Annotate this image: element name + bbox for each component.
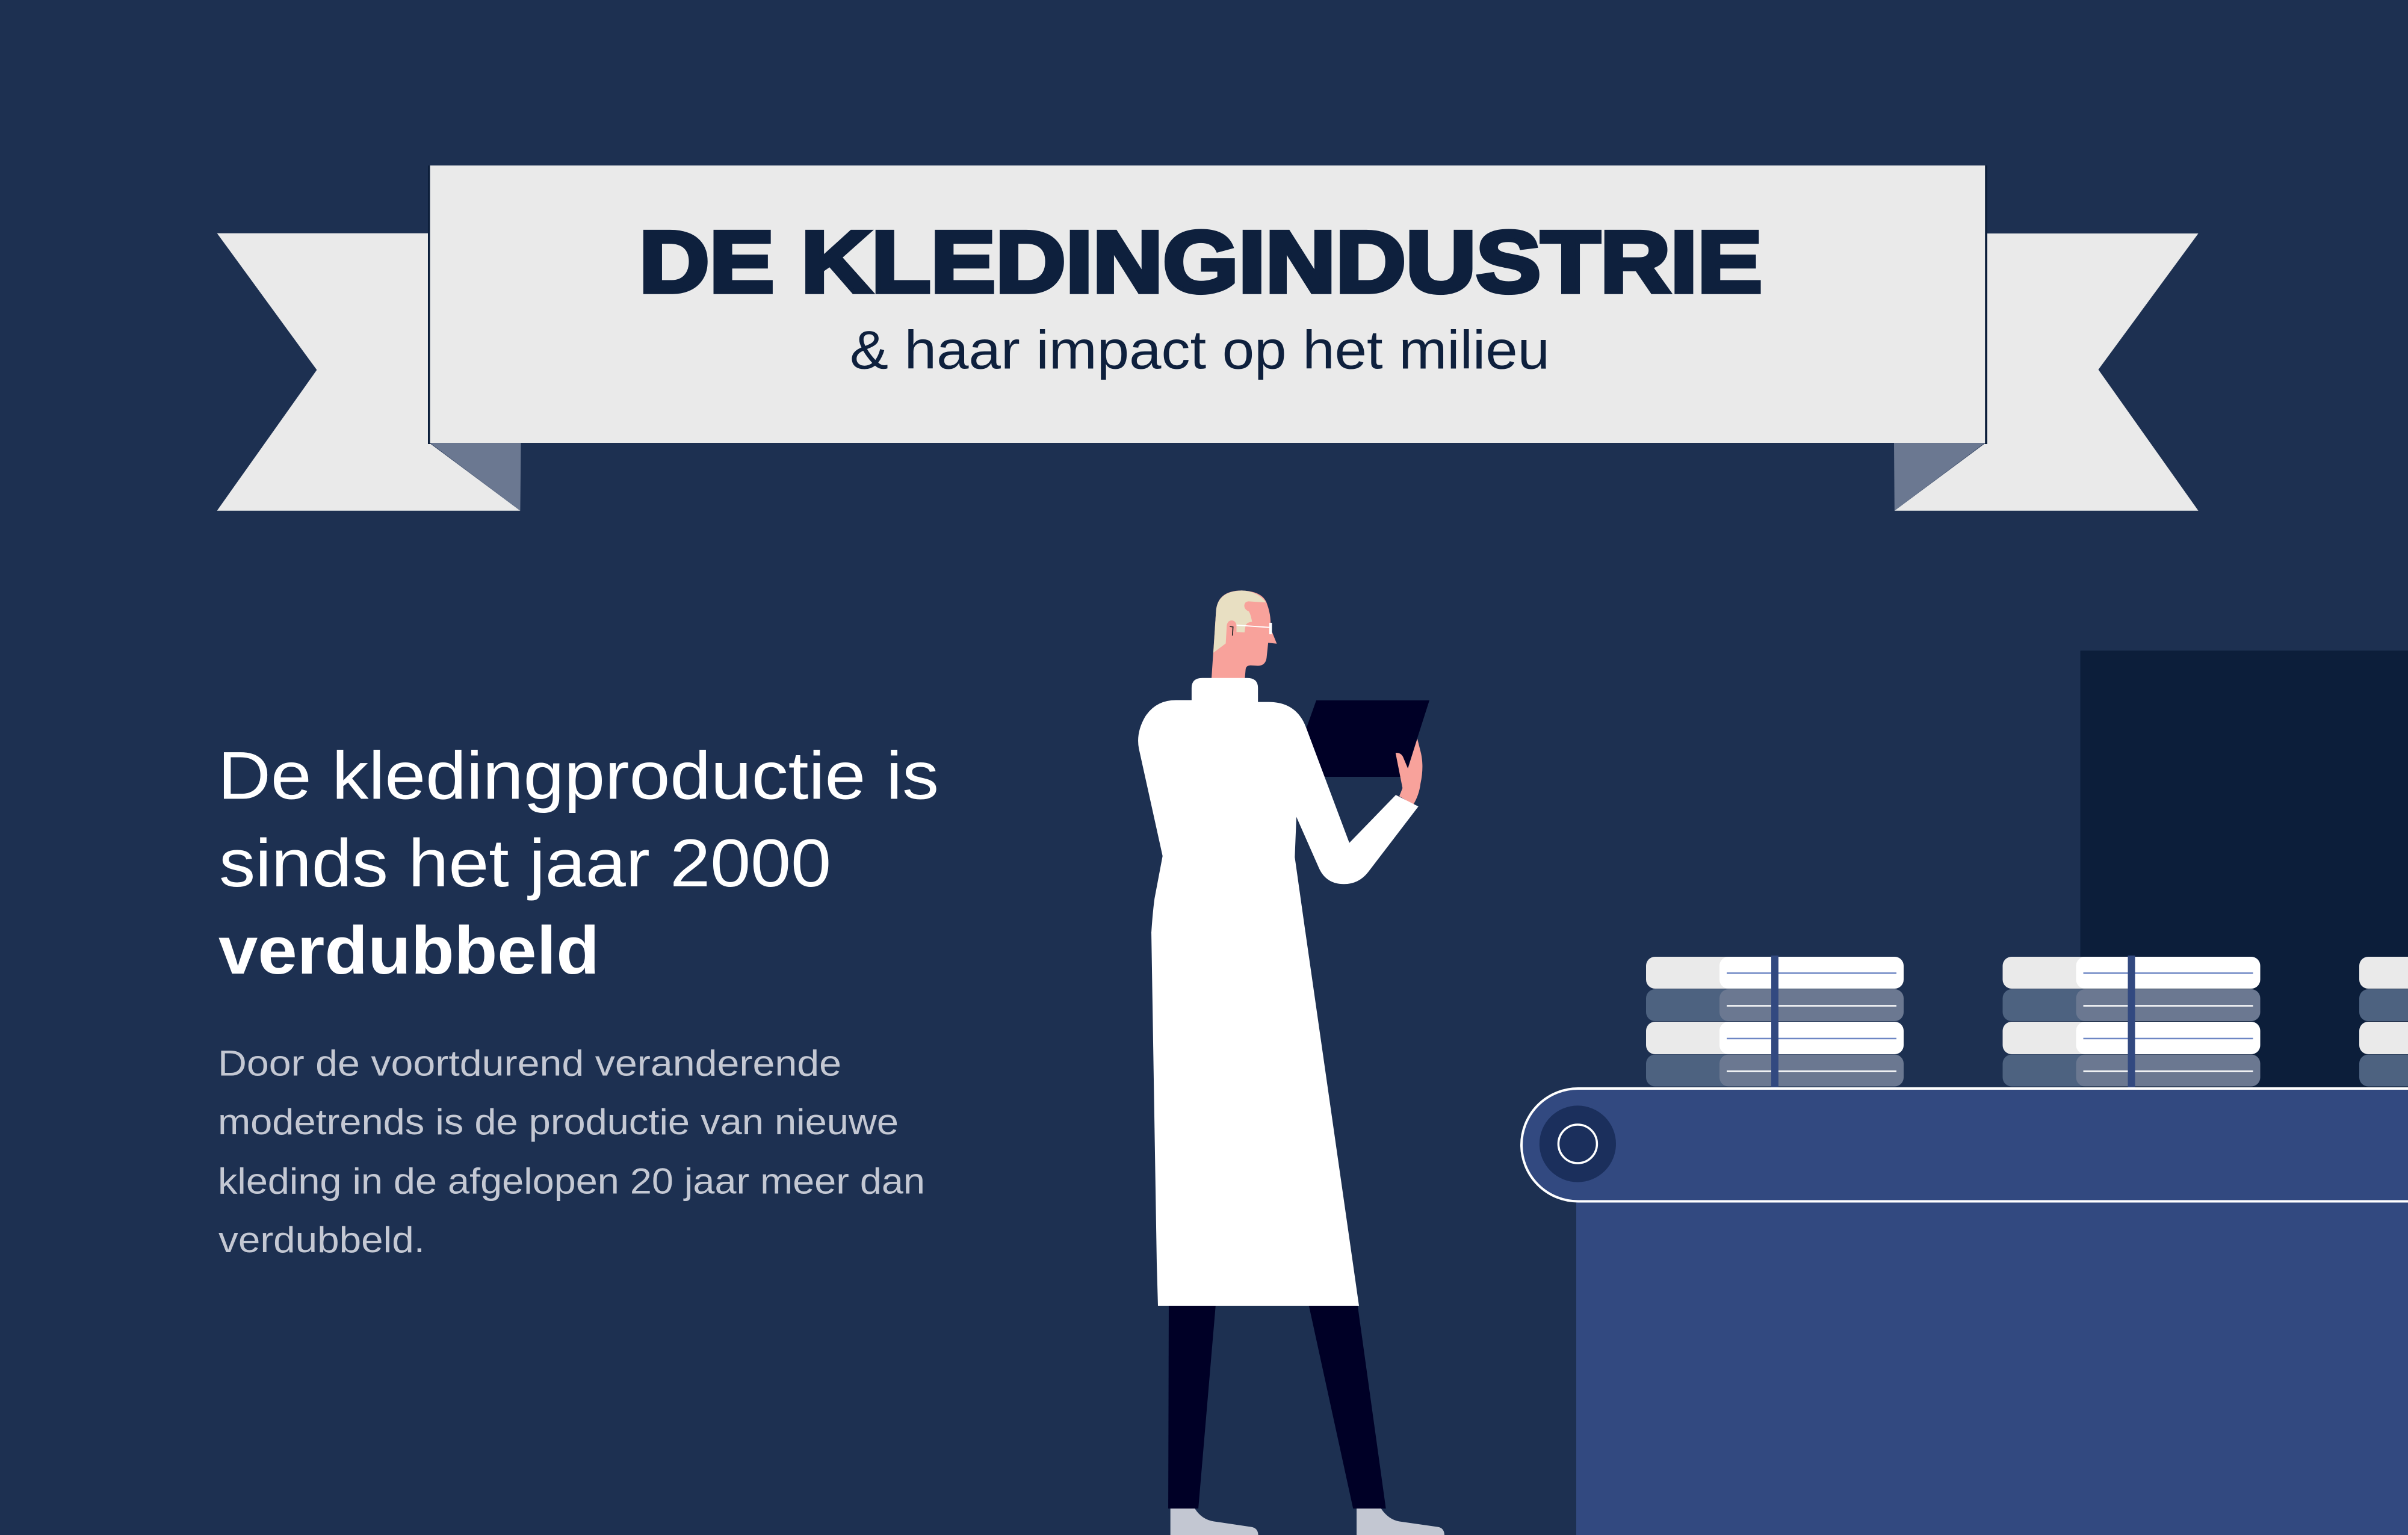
factory scene: dark doorway xyxy=(2080,650,2408,1090)
paragraph line 3: kleding in de afgelopen 20 jaar meer dan xyxy=(218,1161,925,1201)
heading line 2: sinds het jaar 2000 xyxy=(219,826,831,901)
conveyor belt xyxy=(1521,1089,2408,1201)
hair xyxy=(1213,590,1266,653)
ribbon fold: right xyxy=(1894,443,1985,511)
ear detail xyxy=(1230,626,1233,635)
right leg xyxy=(1308,1304,1386,1509)
glasses xyxy=(1236,623,1272,634)
right shoe xyxy=(1357,1509,1444,1535)
head and neck xyxy=(1212,590,1277,679)
paragraph line 4: verdubbeld. xyxy=(218,1220,425,1260)
conveyor stack 1 xyxy=(1646,956,1904,1088)
banner shadow edge: right xyxy=(1985,165,1987,444)
heading line 3, bold: verdubbeld xyxy=(218,913,599,988)
paragraph line 2: modetrends is de productie van nieuwe xyxy=(218,1102,899,1142)
subtitle: & haar impact op het milieu xyxy=(850,321,1550,381)
belt roller ring xyxy=(1558,1125,1597,1163)
left leg xyxy=(1168,1304,1216,1509)
ribbon tail: left xyxy=(217,233,520,511)
heading line 1: De kledingproductie is xyxy=(218,738,939,814)
coat upper part xyxy=(1138,678,1419,933)
legs and shoes xyxy=(1168,1304,1444,1535)
hand xyxy=(1396,738,1422,805)
conveyor stack 3, cropped at edge xyxy=(2359,957,2408,1087)
body paragraph xyxy=(218,1043,925,1260)
heading text block xyxy=(218,738,939,988)
belt roller hub xyxy=(1540,1105,1616,1182)
belt body xyxy=(1521,1089,2408,1201)
tablet xyxy=(1307,700,1429,777)
coat lower part xyxy=(1151,932,1359,1306)
person in white coat with tablet xyxy=(1138,590,1444,1535)
conveyor machine base xyxy=(1576,1197,2408,1535)
left shoe xyxy=(1171,1509,1258,1535)
paragraph line 1: Door de voortdurend veranderende xyxy=(218,1043,841,1083)
ribbon fold: left xyxy=(430,443,521,511)
banner shadow edge: left xyxy=(428,165,430,444)
banner panel xyxy=(430,165,1985,443)
banner ribbon xyxy=(217,165,2199,511)
conveyor stack 2 xyxy=(2003,956,2261,1088)
upper body xyxy=(1138,590,1429,933)
ribbon tail: right xyxy=(1895,233,2199,511)
title: DE KLEDINGINDUSTRIE xyxy=(639,213,1762,310)
